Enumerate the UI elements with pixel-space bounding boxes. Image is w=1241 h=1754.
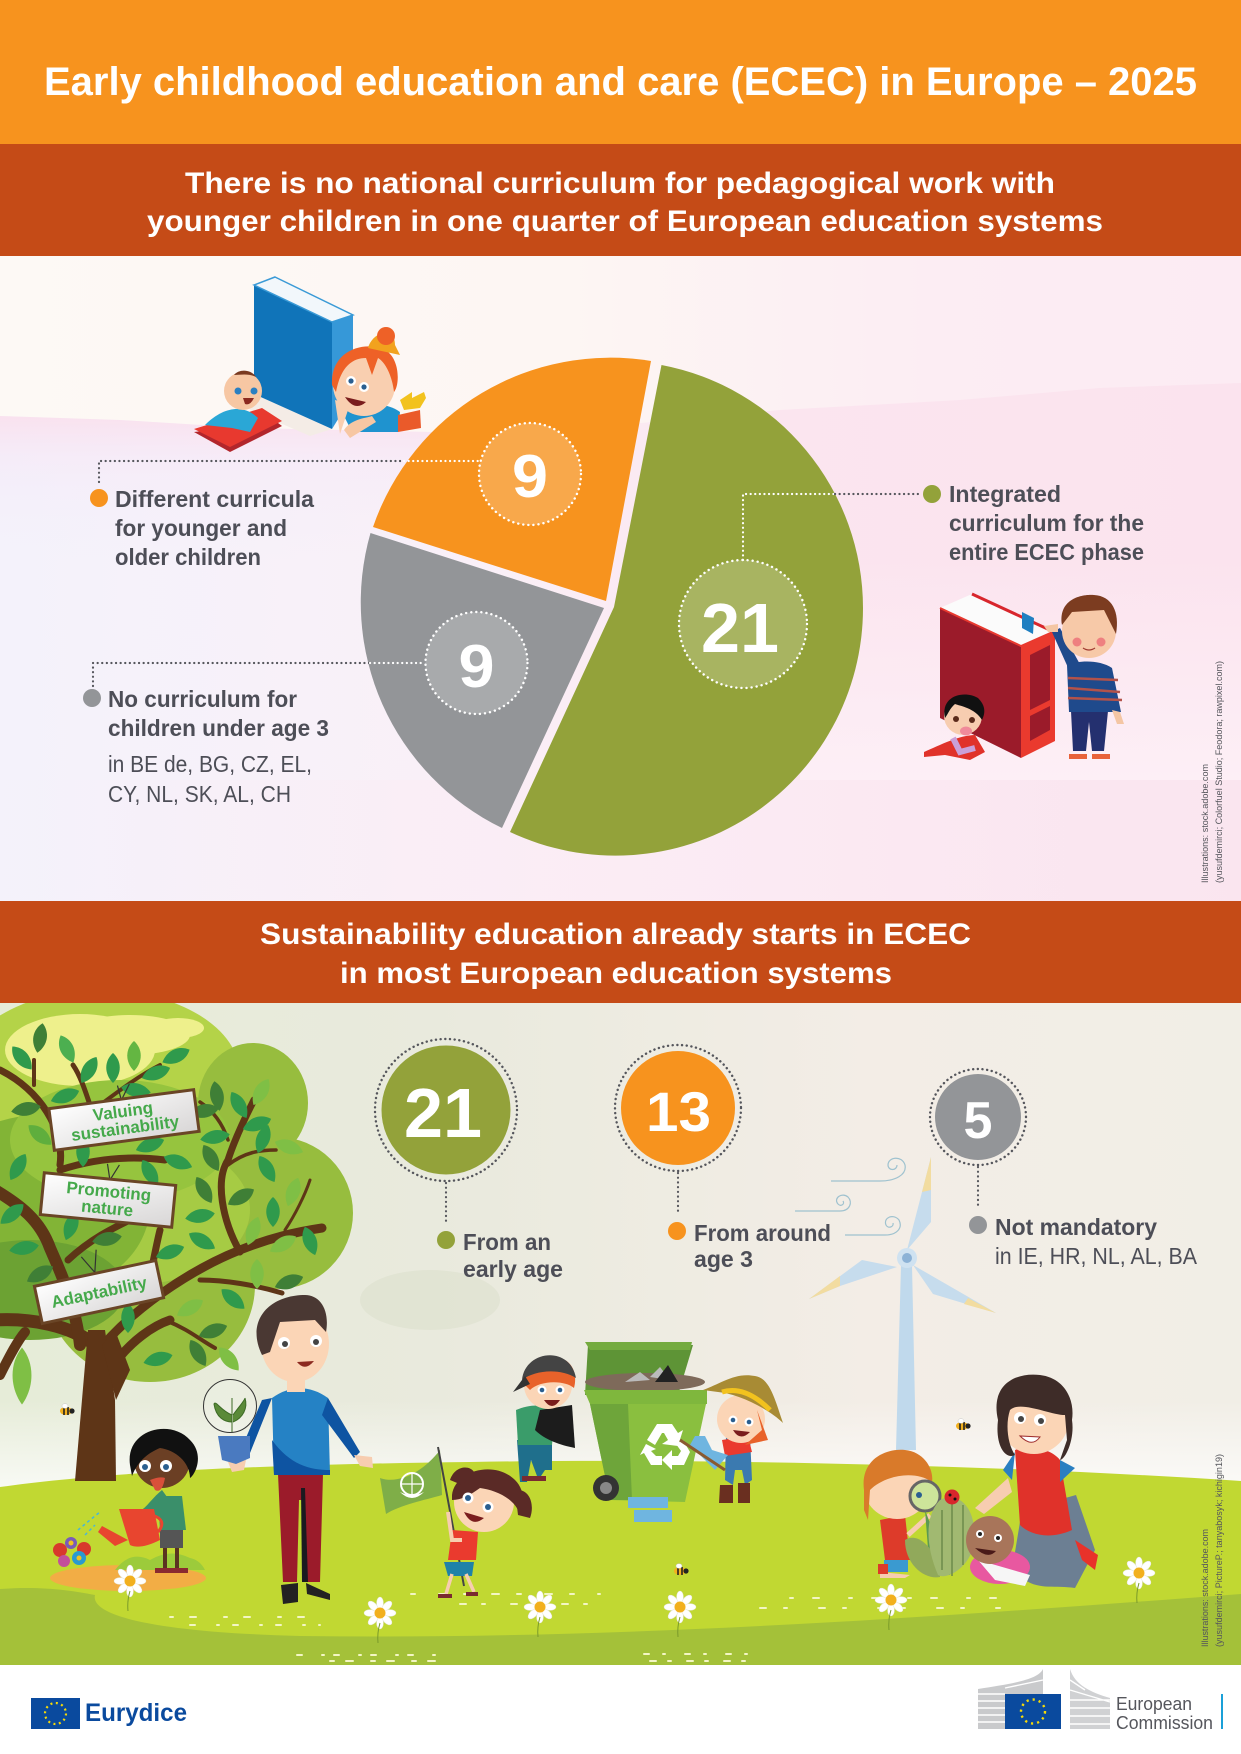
sign: valuing sustainability: Valuing <box>92 1098 154 1125</box>
wind swirls <box>795 1158 905 1235</box>
credit: illustrations, section 2 <box>1200 1454 1224 1647</box>
stat: 13 from around age 3: 13 <box>646 1080 711 1143</box>
heading band: curriculum: younger children in one quarter of European education systems <box>147 205 1103 238</box>
sign: adaptability: Adaptability <box>50 1273 149 1312</box>
value circle: 9 orange: 9 <box>512 443 548 510</box>
label: integrated curriculum: Integrated <box>949 481 1061 507</box>
label: integrated curriculum: curriculum for the <box>949 510 1144 536</box>
illustration: girl with green flag <box>380 1447 532 1598</box>
leader lines <box>93 461 920 686</box>
illustration: man with plant bulb <box>204 1295 373 1604</box>
pie slice: integrated curriculum 21 <box>510 365 863 856</box>
credit: illustrations, section 2: Illustrations: stock.adobe.com <box>1200 1529 1210 1647</box>
illustration: tree with signs <box>0 990 353 1481</box>
stat: 21 from an early age: From an <box>463 1229 551 1255</box>
label: no curriculum: CY, NL, SK, AL, CH <box>108 781 291 807</box>
stat: 5 not mandatory: in IE, HR, NL, AL, BA <box>995 1243 1198 1269</box>
stat: 5 not mandatory: Not mandatory <box>995 1214 1157 1240</box>
wind turbine <box>809 1157 996 1450</box>
label: integrated curriculum: entire ECEC phase <box>949 539 1144 565</box>
stat: 13 from around age 3: From around <box>694 1220 831 1246</box>
credit: illustrations, section 1: (yusufdemirci; Colorfuel Studio; Feodora; rawpixel.com) <box>1214 661 1224 883</box>
label: different curricula: older children <box>115 544 261 570</box>
footer <box>0 1665 1241 1754</box>
stat: 5 not mandatory <box>930 1069 1198 1269</box>
credit: illustrations, section 1: Illustrations: stock.adobe.com <box>1200 764 1210 883</box>
illustration: child with magnifier, plant, baby <box>864 1450 975 1578</box>
label: different curricula: for younger and <box>115 515 287 541</box>
panel: sustainability scene <box>0 990 1241 1665</box>
illustration: woman and baby <box>966 1375 1098 1588</box>
label: no curriculum: in BE de, BG, CZ, EL, <box>108 751 312 777</box>
value circle: 9 orange <box>479 423 581 525</box>
stat: 5 not mandatory: 5 <box>964 1092 992 1150</box>
logo: European Commission: European <box>1116 1694 1192 1714</box>
illustration: red book with two children <box>924 594 1124 760</box>
sign: valuing sustainability <box>47 1076 199 1150</box>
heading band: curriculum <box>0 144 1241 256</box>
sign: adaptability <box>32 1250 166 1325</box>
credit: illustrations, section 2: (yusufdemirci; PictureP.; tanyabosyk; kichigin19) <box>1214 1454 1224 1647</box>
sign: promoting nature: nature <box>80 1197 134 1220</box>
pie slice: different curricula 9 <box>373 358 651 601</box>
logo: Eurydice <box>31 1698 187 1729</box>
label: different curricula <box>90 486 314 570</box>
pie chart <box>361 358 863 856</box>
illustration: blue book with two children <box>194 277 426 452</box>
ground <box>0 1461 1241 1665</box>
value circle: 9 grey <box>426 612 528 714</box>
sign: valuing sustainability: sustainability <box>70 1112 181 1145</box>
value circle: 21 green: 21 <box>701 589 779 667</box>
illustration: recycling bin <box>584 1342 707 1522</box>
daisies <box>114 1557 1155 1643</box>
value circle: 9 grey: 9 <box>458 633 494 700</box>
label: no curriculum: children under age 3 <box>108 715 329 741</box>
label: no curriculum <box>83 686 329 807</box>
stat: 13 from around age 3: age 3 <box>694 1246 753 1272</box>
label: integrated curriculum <box>923 481 1144 565</box>
heading band: sustainability: in most European education systems <box>340 957 892 990</box>
sign: promoting nature: Promoting <box>66 1178 152 1205</box>
stat: 13 from around age 3 <box>615 1045 831 1272</box>
heading band: sustainability <box>0 901 1241 1003</box>
heading band: sustainability: Sustainability education already starts in ECEC <box>260 918 971 951</box>
pie slice: no curriculum 9 <box>361 533 604 828</box>
label: different curricula: Different curricula <box>115 486 314 512</box>
value circle: 21 green <box>679 560 807 688</box>
stat: 21 from an early age: 21 <box>404 1074 482 1152</box>
credit: illustrations, section 1 <box>1200 661 1224 883</box>
illustration: boy with rubbish bag <box>513 1355 576 1482</box>
illustration: child with hat holding bottles <box>680 1375 783 1503</box>
stat: 21 from an early age <box>375 1039 563 1282</box>
heading band: curriculum: There is no national curriculum for pedagogical work with <box>185 167 1055 200</box>
panel: curriculum pie section <box>0 256 1241 901</box>
logo: European Commission <box>978 1669 1223 1733</box>
stat: 21 from an early age: early age <box>463 1256 563 1282</box>
logo: Eurydice: Eurydice <box>85 1699 187 1727</box>
illustration: flower patch and child watering <box>50 1429 206 1591</box>
header band: title <box>0 0 1241 144</box>
label: no curriculum: No curriculum for <box>108 686 297 712</box>
logo: European Commission: Commission <box>1116 1713 1213 1733</box>
sign: promoting nature <box>40 1158 177 1227</box>
bees <box>60 1404 971 1575</box>
title: Early childhood education and care (ECEC) in Europe – 2025 <box>44 60 1197 104</box>
